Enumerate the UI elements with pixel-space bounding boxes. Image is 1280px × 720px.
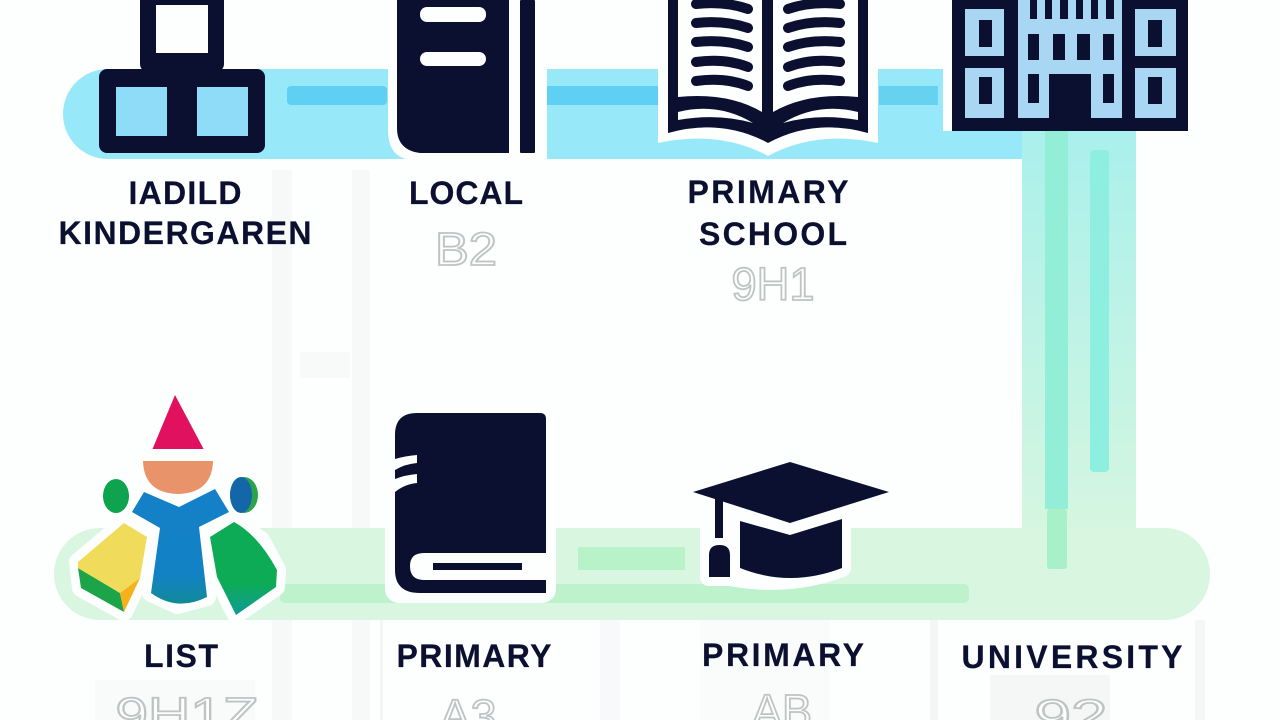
- label: iadild kindergarten: KINDERGAREN: [58, 215, 312, 251]
- icon: open book: [658, 0, 878, 156]
- label: primary school: 9H1: [732, 258, 814, 310]
- icon: colourful child figure: [78, 395, 277, 615]
- label: primary second: [702, 637, 864, 720]
- label: primary second: PRIMARY: [702, 637, 864, 673]
- icon: graduation cap: [693, 462, 889, 581]
- label: local: [409, 175, 523, 275]
- icon: school building: [952, 0, 1188, 131]
- bottom green band: [54, 509, 1210, 620]
- icon: thick closed book: [385, 403, 556, 603]
- top blue band: [63, 69, 1022, 159]
- label: primary school: SCHOOL: [699, 216, 847, 252]
- label: university: [962, 639, 1182, 720]
- label: local: B2: [435, 223, 497, 275]
- label: local: LOCAL: [409, 175, 523, 211]
- vertical connector band: [1022, 130, 1136, 550]
- icon: building blocks: [99, 0, 265, 153]
- label: iadild kindergarten: IADILD: [128, 175, 242, 211]
- label: iadild kindergarten: [58, 175, 312, 251]
- label: primary: [396, 638, 552, 720]
- label: list: LIST: [144, 638, 218, 674]
- icon: closed book with stripes: [388, 0, 547, 160]
- label: primary school: [688, 174, 848, 310]
- label: primary: PRIMARY: [396, 638, 552, 674]
- label: list: [116, 638, 258, 720]
- label: primary school: PRIMARY: [688, 174, 848, 210]
- label: university: UNIVERSITY: [962, 639, 1182, 675]
